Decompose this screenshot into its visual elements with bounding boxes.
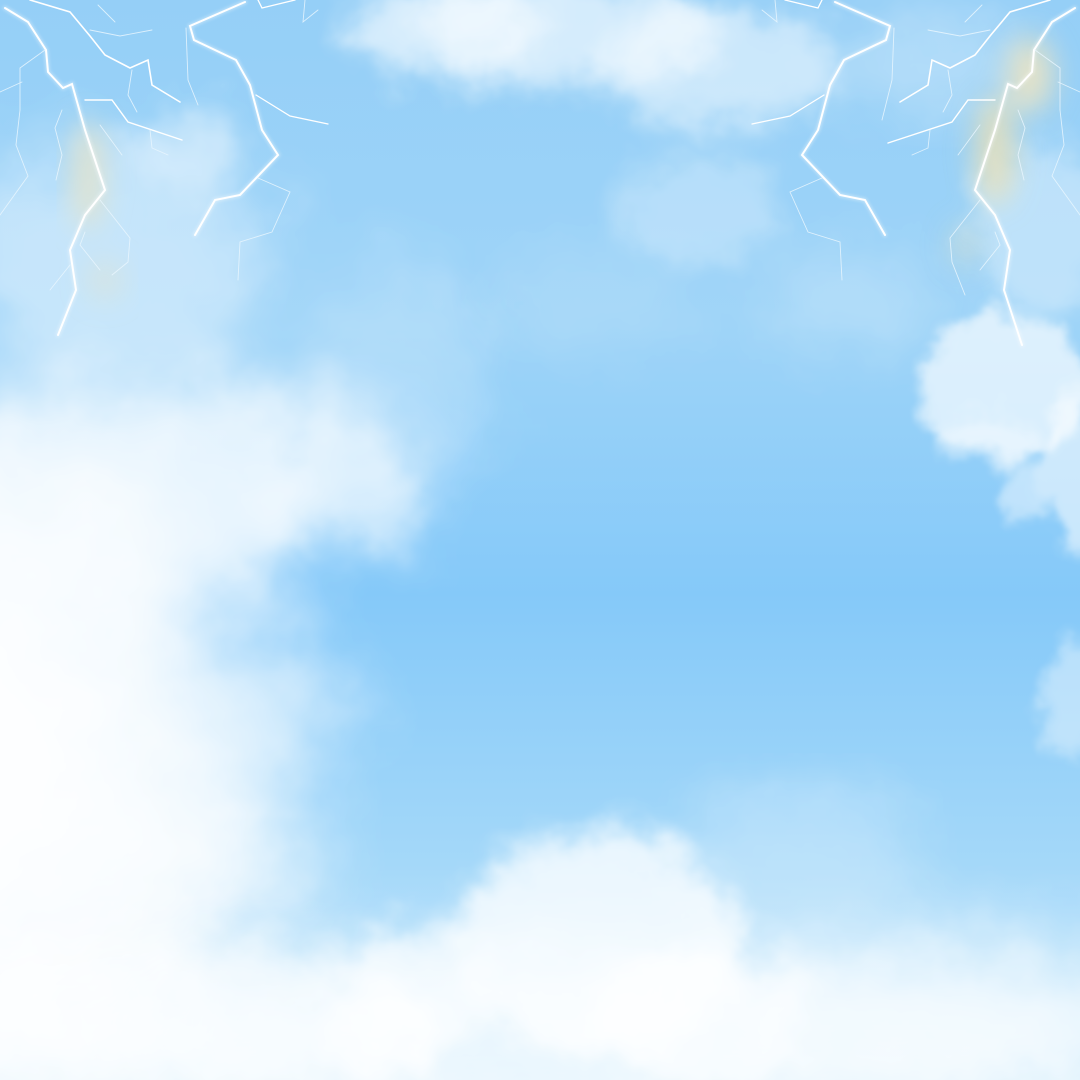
cloud: bottom bank xyxy=(0,780,1080,1080)
glow: left lightning xyxy=(72,120,123,300)
cloud: large left bank xyxy=(0,114,490,1080)
lightning side branches, left xyxy=(0,0,318,290)
cloud: top centre xyxy=(340,0,1030,350)
lightning bolt halo, right xyxy=(802,2,1075,345)
lightning side branches, right xyxy=(762,0,1080,295)
lightning: right group xyxy=(752,0,1080,345)
lightning bolt halo, left xyxy=(5,2,278,335)
lightning: left group xyxy=(0,0,328,335)
cloud: right edge xyxy=(920,145,1080,762)
lightning bolt core, left xyxy=(5,0,328,335)
lightning bolt core, right xyxy=(752,0,1075,345)
glow: right lightning xyxy=(949,37,1054,267)
